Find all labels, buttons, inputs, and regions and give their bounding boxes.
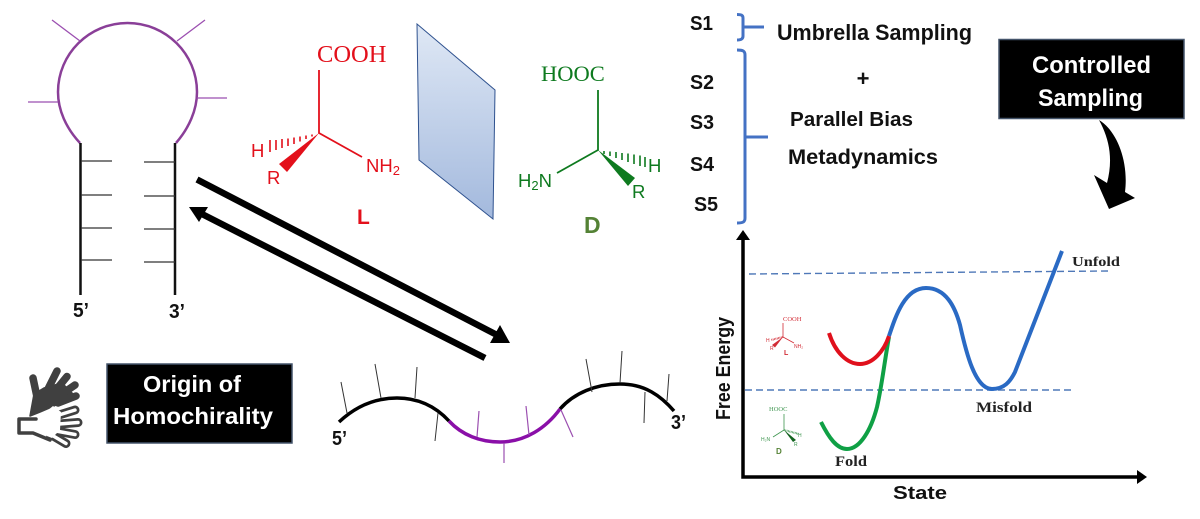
Misfold label: Misfold bbox=[976, 400, 1032, 416]
D letter: D bbox=[584, 212, 601, 238]
mini D molecule: D bbox=[776, 447, 782, 456]
strand 5 prime label: 5’ bbox=[332, 428, 347, 450]
free energy chart bbox=[713, 230, 1147, 503]
5 prime label: 5’ bbox=[73, 300, 89, 322]
green curve bbox=[821, 337, 889, 449]
mini D molecule: HOOC bbox=[769, 406, 787, 413]
Fold label: Fold bbox=[835, 454, 867, 470]
mini L molecule: R bbox=[770, 346, 774, 352]
bracket S1 bbox=[737, 14, 764, 40]
S1 label: S1 bbox=[690, 13, 713, 35]
3 prime label: 3’ bbox=[169, 301, 185, 323]
icon: hands bbox=[19, 371, 78, 444]
R label: R bbox=[632, 181, 645, 202]
Umbrella Sampling label: Umbrella Sampling bbox=[777, 20, 972, 45]
black backbone bbox=[339, 384, 674, 422]
mini L molecule: H bbox=[766, 338, 770, 344]
forward arrow bbox=[197, 180, 510, 343]
Controlled Sampling box bbox=[999, 40, 1184, 118]
Parallel Bias label: Parallel Bias bbox=[790, 108, 913, 131]
Free Energy axis label: Free Energy bbox=[713, 316, 735, 420]
hairpin RNA structure bbox=[28, 20, 227, 323]
red curve bbox=[829, 333, 889, 364]
curved arrow bbox=[1094, 120, 1135, 209]
lower outlined hand bbox=[19, 406, 78, 444]
axes bbox=[736, 230, 1147, 484]
unfolded level line bbox=[749, 271, 1109, 274]
Origin of Homochirality box: Homochirality bbox=[113, 403, 273, 429]
purple base ticks bbox=[477, 406, 573, 463]
black base ticks bbox=[341, 351, 669, 441]
mini L molecule: NH₂ bbox=[794, 344, 803, 350]
NH2 label: 2 bbox=[393, 163, 400, 178]
Metadynamics label: Metadynamics bbox=[788, 146, 938, 169]
mini D molecule: R bbox=[794, 442, 798, 448]
Controlled Sampling box: Sampling bbox=[1038, 85, 1143, 112]
H2N label: 2 bbox=[531, 178, 539, 193]
Origin of Homochirality box: Origin of bbox=[143, 371, 241, 397]
NH2 label: NH bbox=[366, 155, 393, 176]
S2 label: S2 bbox=[690, 72, 714, 94]
S3 label: S3 bbox=[690, 112, 714, 134]
purple backbone bbox=[449, 409, 560, 442]
mini D molecule: H bbox=[798, 433, 802, 439]
reverse arrow bbox=[189, 207, 485, 358]
L enantiomer bbox=[251, 41, 400, 229]
hairpin stem bbox=[80, 143, 175, 295]
mini L molecule: L bbox=[784, 350, 789, 357]
single-stranded RNA bbox=[332, 351, 686, 463]
H2N label: N bbox=[539, 170, 552, 191]
misfolded level line bbox=[745, 389, 1075, 391]
strand 3 prime label: 3’ bbox=[671, 412, 686, 434]
mini D molecule bbox=[761, 406, 802, 456]
H label: H bbox=[251, 140, 264, 161]
hairpin loop bbox=[28, 20, 227, 143]
mini L molecule: COOH bbox=[783, 316, 802, 323]
mini L molecule bbox=[766, 316, 803, 357]
D enantiomer bbox=[518, 61, 661, 238]
mirror plane bbox=[417, 24, 495, 219]
upper dark hand bbox=[30, 371, 76, 416]
bracket S2 to S5 bbox=[737, 50, 768, 223]
Unfold label: Unfold bbox=[1072, 254, 1121, 269]
L bonds bbox=[270, 70, 362, 172]
mini D molecule: H₂N bbox=[761, 437, 771, 443]
H2N label: H bbox=[518, 170, 531, 191]
sampling scheme bbox=[690, 13, 972, 223]
blue curve bbox=[889, 251, 1062, 389]
L letter: L bbox=[357, 206, 370, 229]
Controlled Sampling box: Controlled bbox=[1032, 52, 1151, 79]
equilibrium arrows bbox=[189, 180, 510, 358]
S4 label: S4 bbox=[690, 154, 715, 176]
Origin of Homochirality box bbox=[107, 364, 292, 443]
plus sign: + bbox=[857, 66, 869, 91]
R label: R bbox=[267, 167, 280, 188]
S5 label: S5 bbox=[694, 194, 718, 216]
D bonds bbox=[557, 90, 645, 186]
COOH label: COOH bbox=[317, 41, 386, 68]
HOOC label: HOOC bbox=[541, 61, 605, 86]
H label: H bbox=[648, 155, 661, 176]
State axis label: State bbox=[893, 483, 947, 503]
